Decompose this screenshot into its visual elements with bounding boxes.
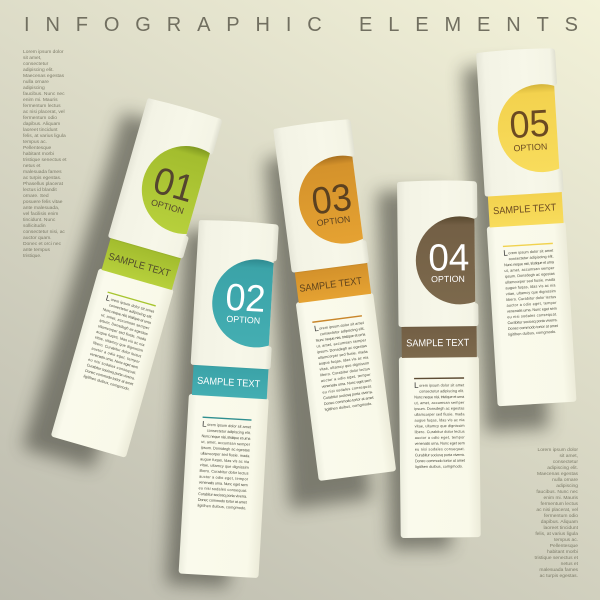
option label 04: OPTION — [431, 274, 465, 284]
body text 01: ligitlhen duibus, comgmodo. — [83, 374, 130, 391]
text block: left column — [23, 49, 67, 259]
text block: left column: tempus ac. — [23, 139, 47, 145]
text block: left column: Donec et orci nec — [23, 241, 62, 247]
text block: left column: netus et — [23, 163, 41, 169]
body text 04: ipsum. Donsdegh ac egestas — [414, 407, 465, 411]
body text 03: auctor a odio eget, tempor — [321, 373, 372, 383]
text block: right column: enim mi. Mauris — [543, 495, 579, 501]
band 01 — [102, 236, 181, 290]
text block: left column: adipiscing elit. — [23, 67, 54, 73]
band label 03: SAMPLE TEXT — [299, 276, 363, 295]
circle 01 — [142, 146, 210, 234]
body text 04: augue fuqas, ldas vis ac nia — [414, 418, 465, 423]
text block: left column: dapibus. Aliquam — [23, 121, 60, 127]
body text 03: vitae, ultamcy que dignissim — [319, 361, 369, 372]
body text 01: ipsum. Donsdegh ac egestas — [99, 319, 148, 336]
text block: left column: habitant morbi — [23, 151, 54, 157]
text block: left column: malesuada fames — [23, 169, 62, 175]
body text 01: ut, amet, accumsan semper — [101, 313, 150, 331]
text block: right column: ac turpis egestas. — [540, 573, 578, 579]
text block: left column: enim mi. Mauris — [23, 97, 58, 103]
option label 02: OPTION — [226, 314, 260, 326]
text block: right column: habitant morbi — [547, 549, 578, 555]
body text 01: eu nisi sodales consequat. — [88, 358, 137, 375]
body text 03: ut, amet, accumsan semper — [316, 338, 367, 349]
band label 01: SAMPLE TEXT — [107, 251, 171, 280]
rule 02 — [203, 417, 252, 421]
upper cap 04 — [397, 180, 479, 327]
text block: left column: nulla ornare — [23, 79, 49, 85]
body text 03: ullamcorper sed fiusie. mada — [318, 350, 369, 360]
body text 05: ut, amet, accumsan semper — [504, 266, 555, 273]
circle 02 — [212, 259, 274, 348]
body text 02: ligitlhen duibus, comgmodo. — [197, 504, 247, 510]
body text 05: libero. Curabitur dolor lectus — [506, 295, 556, 302]
body text 01: Nunc neque nisi, tristique et urna — [102, 307, 152, 325]
panel: option 04 — [397, 180, 481, 538]
body text 02: vitae, ultamcy que dignissim — [200, 463, 249, 470]
circle 05 — [498, 84, 560, 172]
body text 01 — [83, 293, 156, 392]
text block: right column: adipiscing — [556, 483, 578, 489]
body text 02: libero. Curabitur dolor lectus — [199, 469, 249, 476]
lower sheet 02 — [179, 394, 269, 578]
body text 05: venenatis urna. Nunc eget sem — [507, 307, 557, 314]
text block: left column: adipiscing — [23, 85, 45, 91]
body text 02: Donec commodo tortor at amet — [198, 498, 248, 505]
rule 05 — [503, 243, 553, 247]
body text 04 — [414, 380, 466, 469]
number 05: 05 — [508, 103, 551, 147]
band 04 — [402, 324, 477, 358]
text block: left column: Lorem ipsum dolor — [23, 49, 64, 55]
text block: left column: tristique senectus et — [23, 157, 67, 163]
text block: left column: Pellentesque — [23, 145, 52, 151]
band label 05: SAMPLE TEXT — [493, 202, 557, 217]
body text 05: Nunc neque nisi, tristique et urna — [504, 260, 555, 267]
text block: left column: posuere felis vitae — [23, 199, 63, 205]
text block: right column: felis, at varius ligula — [535, 531, 578, 537]
text block: left column: fermentum odio — [23, 115, 57, 121]
text block: left column: ornare. Sed — [23, 193, 49, 199]
body text 05: ullamcorper sed fiusie. mada — [505, 278, 556, 285]
panel: option 01 — [51, 98, 222, 457]
body text 01: venenatis urna. Nunc eget sem — [89, 352, 139, 370]
body text 03: orem ipsum dolor sit amet — [319, 321, 365, 331]
body text 01: ullamcorper sed fiusie. mada — [97, 324, 147, 342]
body text 04: auctor a odio eget, tempor — [415, 435, 465, 440]
rule 04 — [414, 377, 464, 379]
body text 05: consectetur adipiscing elit. — [509, 254, 554, 261]
text block: left column: consectetur nisi, ac — [23, 229, 65, 235]
upper cap 03 — [273, 118, 369, 273]
body text 04: Curabitur sociosq porta viverra. — [415, 453, 465, 457]
text block: left column: ac nisi placerat, vel — [23, 109, 65, 115]
text block: right column: nulla ornare — [552, 477, 578, 483]
text block: left column: lectus id blandit — [23, 187, 57, 193]
text block: left column: sit amet, — [23, 55, 41, 61]
panel: option 05 — [476, 48, 576, 406]
number 02: 02 — [224, 277, 267, 321]
text block: left column: auctor quam. — [23, 235, 52, 241]
lower sheet 01 — [51, 268, 174, 458]
body text 02: eu nisi sodales consequat. — [198, 486, 248, 493]
body text 05: eu nisi sodales consequat. — [507, 312, 557, 319]
body text 05: vitae, ultamcy que dignissim — [506, 289, 556, 296]
text block: left column: tristique. — [23, 253, 41, 259]
body text 03: Curabitur sociosq porta viverra. — [323, 390, 373, 400]
option label 03: OPTION — [316, 214, 351, 228]
body text 04: Nunc neque nisi, tristique et urna — [414, 395, 465, 399]
number 04: 04 — [428, 237, 470, 280]
band 03 — [295, 261, 371, 303]
body text 02: consectetur adipiscing elit. — [207, 429, 251, 435]
body text 03: augue fuqas, ldas vis ac nia — [319, 355, 369, 366]
body text 01: augue fuqas, ldas vis ac nia — [96, 330, 146, 348]
text block: right column: malesuada fames — [539, 567, 579, 573]
text block: right column: laoreet tincidunt — [543, 525, 579, 531]
body text 01: Donec commodo tortor at amet — [85, 369, 135, 387]
title: INFOGRAPHIC ELEMENTS — [24, 14, 578, 36]
body text 01: auctor a odio eget, tempor — [91, 346, 141, 364]
body text 02: orem ipsum dolor sit amet — [207, 423, 252, 429]
panel: option 02 — [178, 220, 279, 578]
text block: left column: felis, at varius ligula — [23, 133, 66, 139]
option label 01: OPTION — [150, 197, 185, 216]
text block: right column: sit amet, — [560, 453, 578, 459]
text block: right column: tempus ac. — [554, 537, 578, 543]
body text 04: ut, amet, accumsan semper — [414, 401, 465, 405]
band label 04: SAMPLE TEXT — [406, 338, 469, 349]
body text 02: ipsum. Donsdegh ac egestas — [201, 446, 250, 453]
text block: right column: netus et — [561, 561, 579, 567]
text block: right column: dapibus. Aliquam — [541, 519, 578, 525]
body text 03: consectetur adipiscing elit. — [320, 327, 365, 336]
number 03: 03 — [309, 177, 354, 223]
text block: right column: fermentum lectus — [540, 501, 579, 507]
panel: option 03 — [274, 120, 396, 481]
band label 02: SAMPLE TEXT — [197, 376, 260, 390]
text block: right column: Pellentesque — [550, 543, 578, 549]
option label 05: OPTION — [513, 141, 548, 153]
text block: right column: ac nisi placerat, vel — [536, 507, 578, 513]
body text 02: ullamcorper sed fiusie. mada — [200, 451, 250, 458]
body text 03: ligitlhen duibus, comgmodo. — [324, 402, 373, 412]
text block: left column: Phasellus placerat — [23, 181, 64, 187]
body text 04: Donec commodo tortor at amet — [415, 459, 466, 463]
body text 02: auctor a odio eget, tempor — [199, 475, 249, 481]
body text 02: venenatis urna. Nunc eget sem — [199, 480, 248, 487]
body text 04: consectetur adipiscing elit. — [419, 389, 464, 394]
text block: right column: adipiscing elit. — [547, 465, 578, 471]
text block: right column: fermentum odio — [544, 513, 578, 519]
body text 05: Donec commodo tortor at amet — [508, 324, 559, 331]
body text 03: ipsum. Donsdegh ac egestas — [317, 344, 367, 354]
text block: left column: ante tempus — [23, 247, 50, 253]
text block: right column: faucibus. Nunc nec — [536, 489, 579, 495]
circle 04 — [416, 216, 476, 304]
body text 04: vitae, ultamcy que dignissim — [415, 424, 465, 428]
text block: right column — [534, 447, 579, 579]
body text 01: L — [105, 293, 112, 303]
body text 02: Curabitur sociosq porta viverra. — [198, 492, 247, 499]
rule 01 — [107, 291, 156, 307]
body text 02 — [197, 420, 252, 510]
body text 01: vitae, ultamcy que dignissim — [94, 335, 143, 353]
body text 03: venenatis urna. Nunc eget sem — [321, 378, 372, 389]
upper cap 01 — [108, 97, 223, 259]
lower sheet 04 — [399, 356, 481, 538]
text block: left column: consectetur — [23, 61, 49, 67]
body text 01: Curabitur sociosq porta viverra. — [86, 363, 135, 381]
text block: left column: tincidunt. Nunc — [23, 217, 56, 223]
text block: left column: laoreet tincidunt — [23, 127, 58, 133]
body text 02: L — [202, 420, 207, 429]
text block: right column: tristique senectus et — [534, 555, 579, 561]
body text 04: ullamcorper sed fiusie. mada — [414, 412, 465, 417]
body text 05: auctor a odio eget, tempor — [506, 301, 557, 308]
body text 02: Nunc neque nisi, tristique et urna — [201, 434, 251, 441]
rule 03 — [312, 315, 362, 323]
text block: left column: sollicitudin — [23, 223, 46, 229]
body text 02: augue fuqas, ldas vis ac nia — [200, 457, 250, 464]
text block: left column: ac turpis egestas. — [23, 175, 61, 181]
body text 04: L — [414, 381, 419, 390]
text block: left column: fermentum lectus — [23, 103, 61, 109]
band 05 — [488, 189, 564, 227]
body text 03: eu nisi sodales consequat. — [322, 384, 372, 395]
body text 05: ligitlhen duibus, comgmodo. — [508, 330, 556, 337]
body text 04: eu nisi sodales consequat. — [415, 447, 465, 452]
body text 01: libero. Curabitur dolor lectus — [93, 341, 142, 359]
body text 03: L — [314, 324, 320, 333]
body text 03: Nunc neque nisi, tristique et urna — [316, 332, 366, 343]
lower sheet 03 — [296, 292, 396, 481]
body text 03: Donec commodo tortor at amet — [324, 396, 375, 406]
circle 03 — [298, 156, 363, 244]
text block: left column: vel facilisis enim — [23, 211, 58, 217]
body text 05: L — [503, 248, 509, 258]
body text 04: orem ipsum dolor sit amet — [419, 383, 465, 388]
text block: right column: consectetur — [553, 459, 578, 465]
body text 05: augue fuqas, ldas vis ac nia — [505, 283, 556, 290]
text block: right column: Lorem ipsum dolor — [537, 447, 578, 453]
upper cap 02 — [191, 219, 279, 369]
upper cap 05 — [476, 47, 564, 197]
body text 01: orem ipsum dolor sit amet — [110, 298, 155, 314]
body text 04: venenatis urna. Nunc eget sem — [415, 441, 465, 446]
body text 04: ligitlhen duibus, comgmodo. — [415, 465, 463, 469]
body text 05: orem ipsum dolor sit amet — [508, 249, 554, 255]
body text 03: libero. Curabitur dolor lectus — [320, 367, 370, 377]
lower sheet 05 — [487, 222, 577, 406]
body text 05: ipsum. Donsdegh ac egestas — [505, 272, 555, 279]
body text 01: consectetur adipiscing elit. — [109, 303, 153, 319]
body text 04: libero. Curabitur dolor lectus — [415, 430, 465, 434]
text block: left column: ante malesuada, — [23, 205, 59, 211]
body text 05 — [503, 246, 559, 337]
text block: right column: Maecenas egestas — [537, 471, 579, 477]
band 02 — [192, 363, 269, 399]
number 01: 01 — [149, 160, 199, 211]
body text 02: ut, amet, accumsan semper — [201, 440, 251, 447]
body text 05: Curabitur sociosq porta viverra. — [507, 318, 558, 325]
text block: left column: faucibus. Nunc nec — [23, 91, 65, 97]
text block: left column: Maecenas egestas — [23, 73, 65, 79]
body text 03 — [314, 318, 376, 412]
